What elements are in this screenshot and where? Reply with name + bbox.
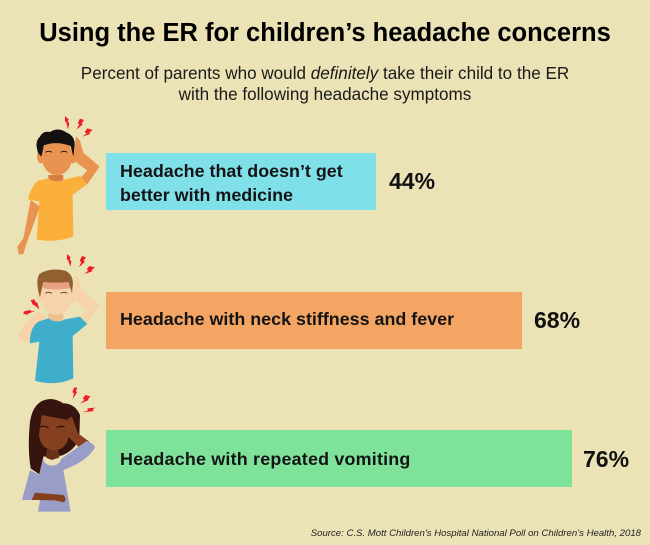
bar: neck stiffness xyxy=(106,292,522,349)
title: Using the ER for children’s headache concerns xyxy=(39,19,611,47)
value: 44%: 44% xyxy=(389,168,435,194)
value: 68%: 68% xyxy=(534,307,580,333)
source note: Source: C.S. Mott Children’s Hospital National Poll on Children’s Health, 2018 xyxy=(311,528,641,539)
icon: woman with lavender top xyxy=(22,388,95,512)
bar label: medicine xyxy=(120,161,343,205)
subtitle: with the following headache symptoms xyxy=(179,85,471,104)
bar label: neck stiffness: Headache with neck stiffness and fever xyxy=(120,309,454,329)
bar: medicine xyxy=(106,153,376,210)
icon: man with blue shirt xyxy=(17,254,100,383)
illustrations layer xyxy=(17,116,100,512)
icon: boy with yellow shirt xyxy=(17,116,100,255)
bar label: medicine: better with medicine xyxy=(120,185,293,205)
bar label: medicine: Headache that doesn’t get xyxy=(120,161,343,181)
subtitle: Percent of parents who would definitely take their child to the ER xyxy=(81,64,569,83)
bar label: vomiting: Headache with repeated vomiting xyxy=(120,449,411,469)
subtitle xyxy=(81,64,569,104)
bar: vomiting xyxy=(106,430,572,487)
value: 76%: 76% xyxy=(583,446,629,472)
